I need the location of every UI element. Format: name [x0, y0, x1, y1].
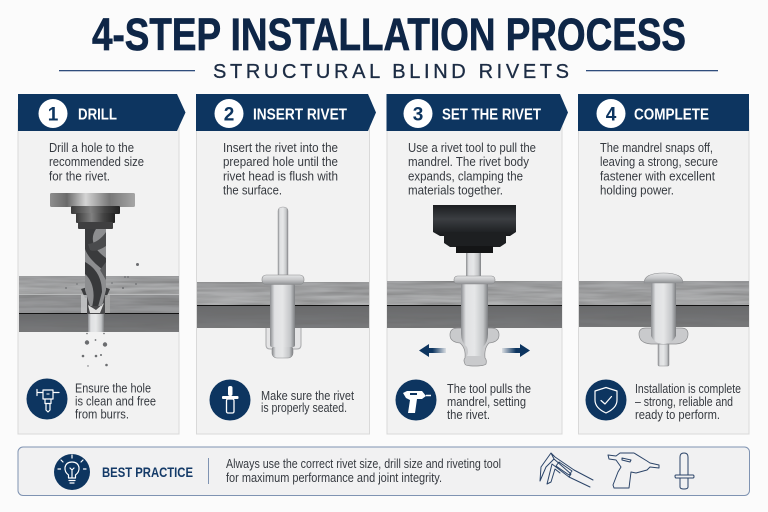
illustration: rivet tool setting rivet	[387, 205, 562, 366]
step 2 header: INSERT RIVET	[253, 106, 347, 124]
step 4 description: leaving a strong, secure	[600, 155, 718, 169]
best practice heading: BEST PRACTICE	[102, 464, 193, 480]
step 4 header	[578, 94, 749, 131]
step 2 header	[196, 94, 376, 131]
illustration: rivet inserted in hole	[197, 207, 369, 358]
callout text: is properly seated.	[261, 400, 347, 415]
step 1 header	[18, 94, 186, 131]
step 3 header: SET THE RIVET	[442, 106, 541, 124]
arrow: left	[419, 344, 446, 357]
panel: best practice bar	[18, 447, 750, 496]
step 3 description	[408, 141, 536, 198]
best practice text	[226, 457, 501, 485]
step 4 description: holding power.	[600, 184, 674, 198]
callout text: The tool pulls the	[447, 381, 531, 396]
step 4 description: The mandrel snaps off,	[600, 141, 713, 155]
panel: step 4 complete	[578, 94, 749, 434]
step 2 description: rivet head is flush with	[223, 170, 338, 184]
callout text: is clean and free	[75, 394, 156, 408]
callout: tool tip	[396, 380, 531, 422]
step 2 header: 2	[224, 104, 234, 126]
step 3 description: materials together.	[408, 184, 503, 198]
illustration: finished rivet	[579, 273, 749, 366]
callout text: – strong, reliable and	[635, 394, 733, 409]
step 1 description	[49, 141, 144, 184]
step 4 description: fastener with excellent	[600, 170, 715, 184]
illustration: drill bit entering plates	[19, 193, 179, 367]
callout text: from burrs.	[75, 406, 129, 422]
icon: light bulb	[54, 454, 90, 490]
step 2 description: prepared hole until the	[223, 155, 338, 169]
icon: caliper	[540, 453, 593, 487]
callout text	[75, 380, 156, 422]
step 1 description: for the rivet.	[49, 170, 110, 184]
callout: clean hole tip	[26, 378, 156, 422]
step 2 description: Insert the rivet into the	[223, 141, 338, 155]
step 4 header: COMPLETE	[634, 106, 709, 124]
step 3 description: Use a rivet tool to pull the	[408, 141, 536, 155]
panel: step 2 insert rivet	[196, 94, 376, 434]
callout text: mandrel, setting	[447, 394, 526, 409]
step 1 description: Drill a hole to the	[49, 141, 134, 155]
callout text: Make sure the rivet	[261, 388, 354, 403]
step 3 header: 3	[413, 104, 423, 126]
best practice text: Always use the correct rivet size, drill size and riveting tool	[226, 457, 501, 471]
icon: rivet	[210, 380, 250, 420]
callout text: Installation is complete	[635, 381, 741, 396]
icon: rivet outline	[675, 453, 694, 489]
callout text: the rivet.	[447, 407, 490, 422]
callout text: Ensure the hole	[75, 380, 151, 396]
icon: drill	[26, 378, 68, 420]
callout text	[635, 381, 741, 422]
best practice text: for maximum performance and joint integrity.	[226, 471, 442, 485]
step 4 description	[600, 141, 718, 198]
step 2 description	[223, 141, 338, 198]
subtitle: STRUCTURAL BLIND RIVETS	[213, 61, 569, 83]
icon: rivet gun	[396, 380, 436, 420]
arrow: right	[502, 344, 530, 357]
panel: step 1 drill	[18, 94, 186, 434]
icon: rivet gun outline	[608, 453, 659, 488]
step 1 description: recommended size	[49, 155, 144, 169]
panel: step 3 set the rivet	[386, 94, 568, 434]
step 1 header: 1	[48, 104, 59, 126]
callout: completion note	[586, 380, 741, 422]
callout text: ready to perform.	[635, 407, 720, 422]
callout: seating tip	[210, 380, 354, 420]
step 1 header: DRILL	[78, 106, 117, 124]
step 3 header	[386, 94, 568, 131]
step 2 description: the surface.	[223, 184, 282, 198]
step 3 description: mandrel. The rivet body	[408, 155, 530, 169]
icon: shield check	[586, 380, 626, 420]
step 3 description: expands, clamping the	[408, 170, 523, 184]
callout text	[261, 388, 354, 415]
callout text	[447, 381, 531, 422]
step 4 header: 4	[606, 104, 617, 126]
